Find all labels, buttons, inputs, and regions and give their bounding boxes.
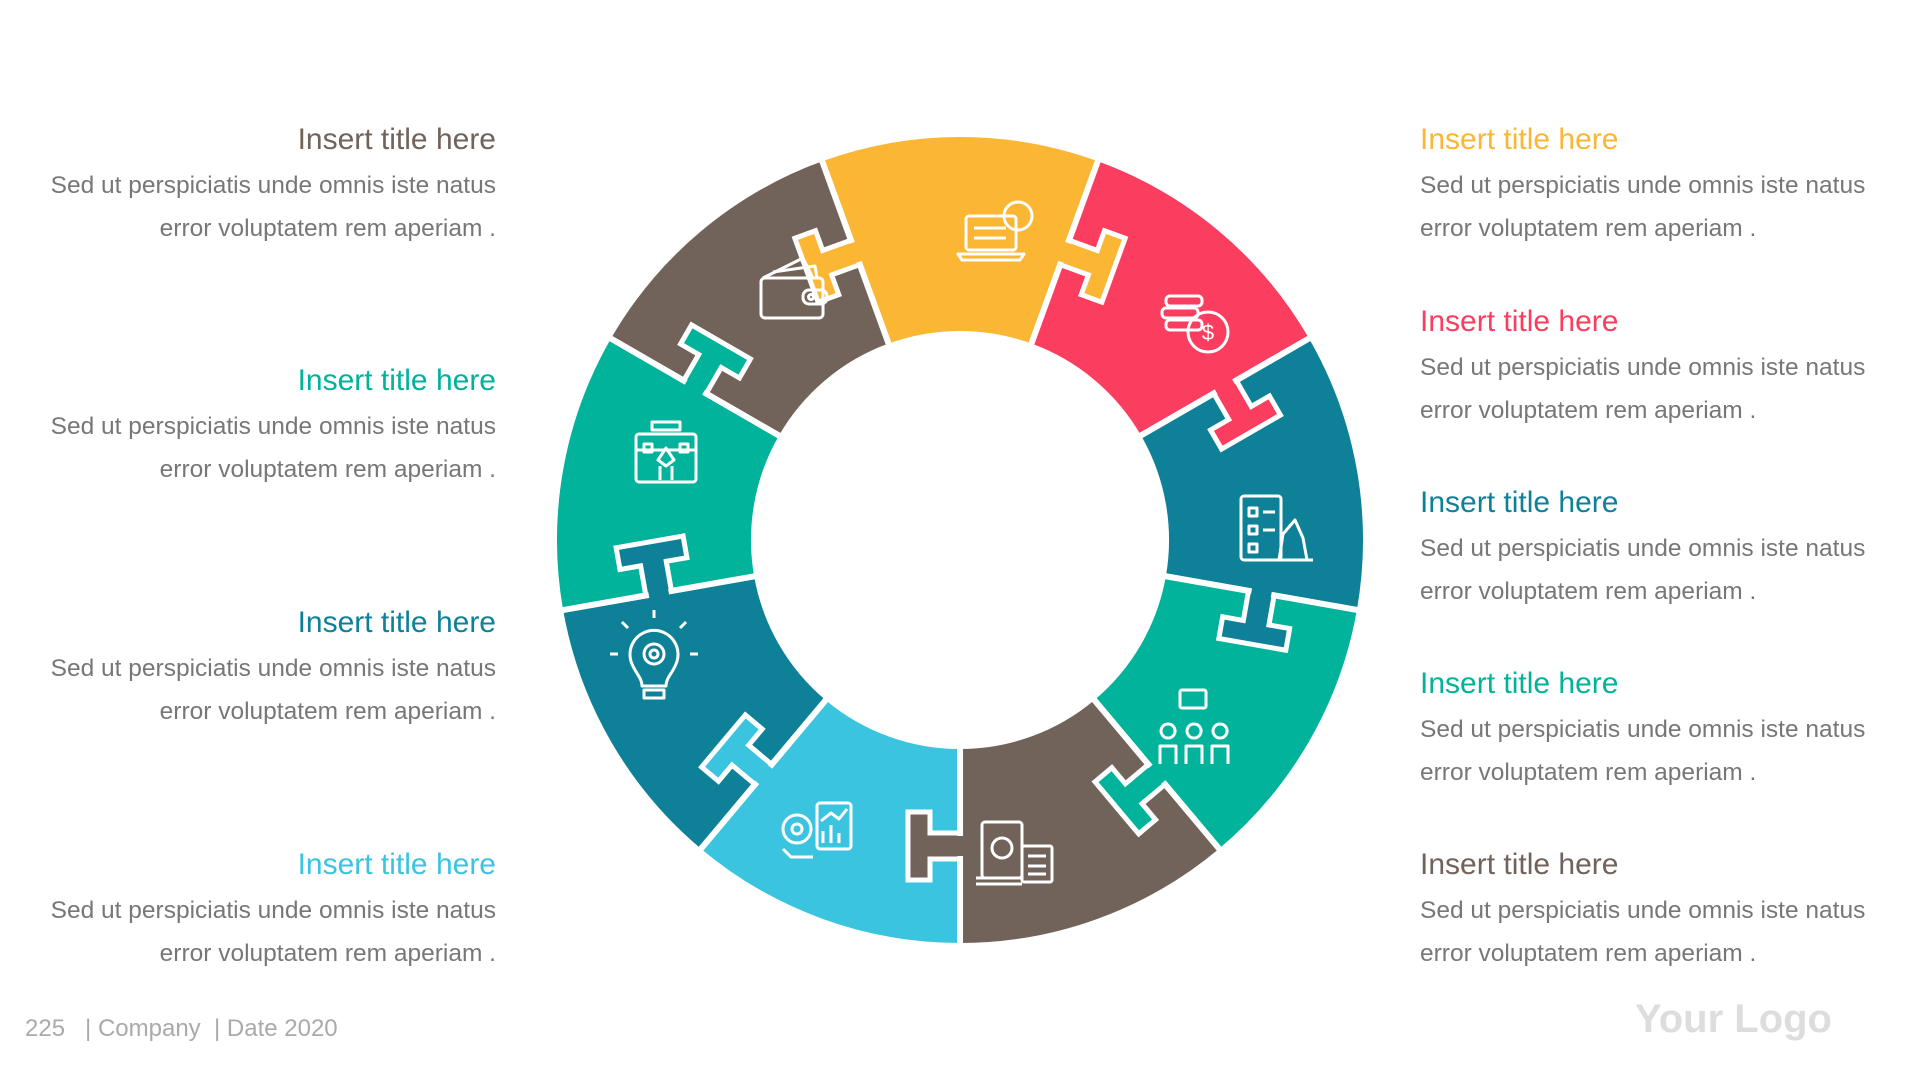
left text 2: error voluptatem rem aperiam .: [160, 456, 496, 483]
right text 2: Insert title here: [1420, 305, 1618, 338]
left text 1: [51, 123, 496, 242]
icon: checklist strategy: [1241, 496, 1313, 560]
left text 4: error voluptatem rem aperiam .: [160, 940, 496, 967]
left text 2: Sed ut perspiciatis unde omnis iste natus: [51, 413, 496, 440]
right text 1: [1420, 123, 1865, 242]
right text 5: Insert title here: [1420, 848, 1618, 881]
icon: lightbulb gear: [610, 610, 698, 698]
right text 2: Sed ut perspiciatis unde omnis iste natus: [1420, 354, 1865, 381]
right text 5: [1420, 848, 1865, 967]
left text 3: Insert title here: [298, 606, 496, 639]
right text 4: Sed ut perspiciatis unde omnis iste natus: [1420, 716, 1865, 743]
right text 4: [1420, 667, 1865, 786]
icon: gear chart: [783, 803, 851, 857]
left text 4: Sed ut perspiciatis unde omnis iste natus: [51, 897, 496, 924]
left text 1: error voluptatem rem aperiam .: [160, 215, 496, 242]
segment: dark teal: [539, 517, 862, 863]
segment: green: [1058, 517, 1381, 863]
right text 2: error voluptatem rem aperiam .: [1420, 397, 1756, 424]
segment: light blue: [691, 674, 1024, 969]
segment: brown: [896, 674, 1229, 969]
right text 1: Insert title here: [1420, 123, 1618, 156]
left text 4: [51, 848, 496, 967]
right text 3: Sed ut perspiciatis unde omnis iste natus: [1420, 535, 1865, 562]
right text 5: Sed ut perspiciatis unde omnis iste natus: [1420, 897, 1865, 924]
left text 2: [51, 364, 496, 483]
icon: finance calculator: [976, 822, 1052, 884]
right text 3: error voluptatem rem aperiam .: [1420, 578, 1756, 605]
left text 3: Sed ut perspiciatis unde omnis iste natus: [51, 655, 496, 682]
icon: design toolbox: [636, 422, 696, 482]
puzzle tabs: [616, 218, 1296, 880]
right text 4: error voluptatem rem aperiam .: [1420, 759, 1756, 786]
icon: coins dollar: $: [1202, 320, 1214, 345]
right text 3: Insert title here: [1420, 486, 1618, 519]
footer: 225 | Company | Date 2020: [25, 1015, 338, 1042]
left text 4: Insert title here: [298, 848, 496, 881]
icon: coins dollar: [1162, 296, 1228, 352]
right text 5: error voluptatem rem aperiam .: [1420, 940, 1756, 967]
icon: team: [1160, 690, 1228, 764]
segment: brown 2: [593, 140, 942, 481]
right text 4: Insert title here: [1420, 667, 1618, 700]
right text 2: [1420, 305, 1865, 424]
right text 3: [1420, 486, 1865, 605]
logo: Your Logo: [1635, 997, 1832, 1041]
segment: blue: [1127, 333, 1384, 643]
right text 1: Sed ut perspiciatis unde omnis iste natus: [1420, 172, 1865, 199]
icon: wallet: [761, 258, 827, 318]
left text 2: Insert title here: [298, 364, 496, 397]
left text 3: error voluptatem rem aperiam .: [160, 698, 496, 725]
left text 3: [51, 606, 496, 725]
right text 1: error voluptatem rem aperiam .: [1420, 215, 1756, 242]
segment: yellow: [821, 134, 1099, 346]
left text 1: Insert title here: [298, 123, 496, 156]
segment: green 2: [536, 333, 793, 643]
left text 1: Sed ut perspiciatis unde omnis iste natus: [51, 172, 496, 199]
segment: red: [978, 140, 1327, 481]
icon: laptop refresh: [958, 202, 1032, 260]
